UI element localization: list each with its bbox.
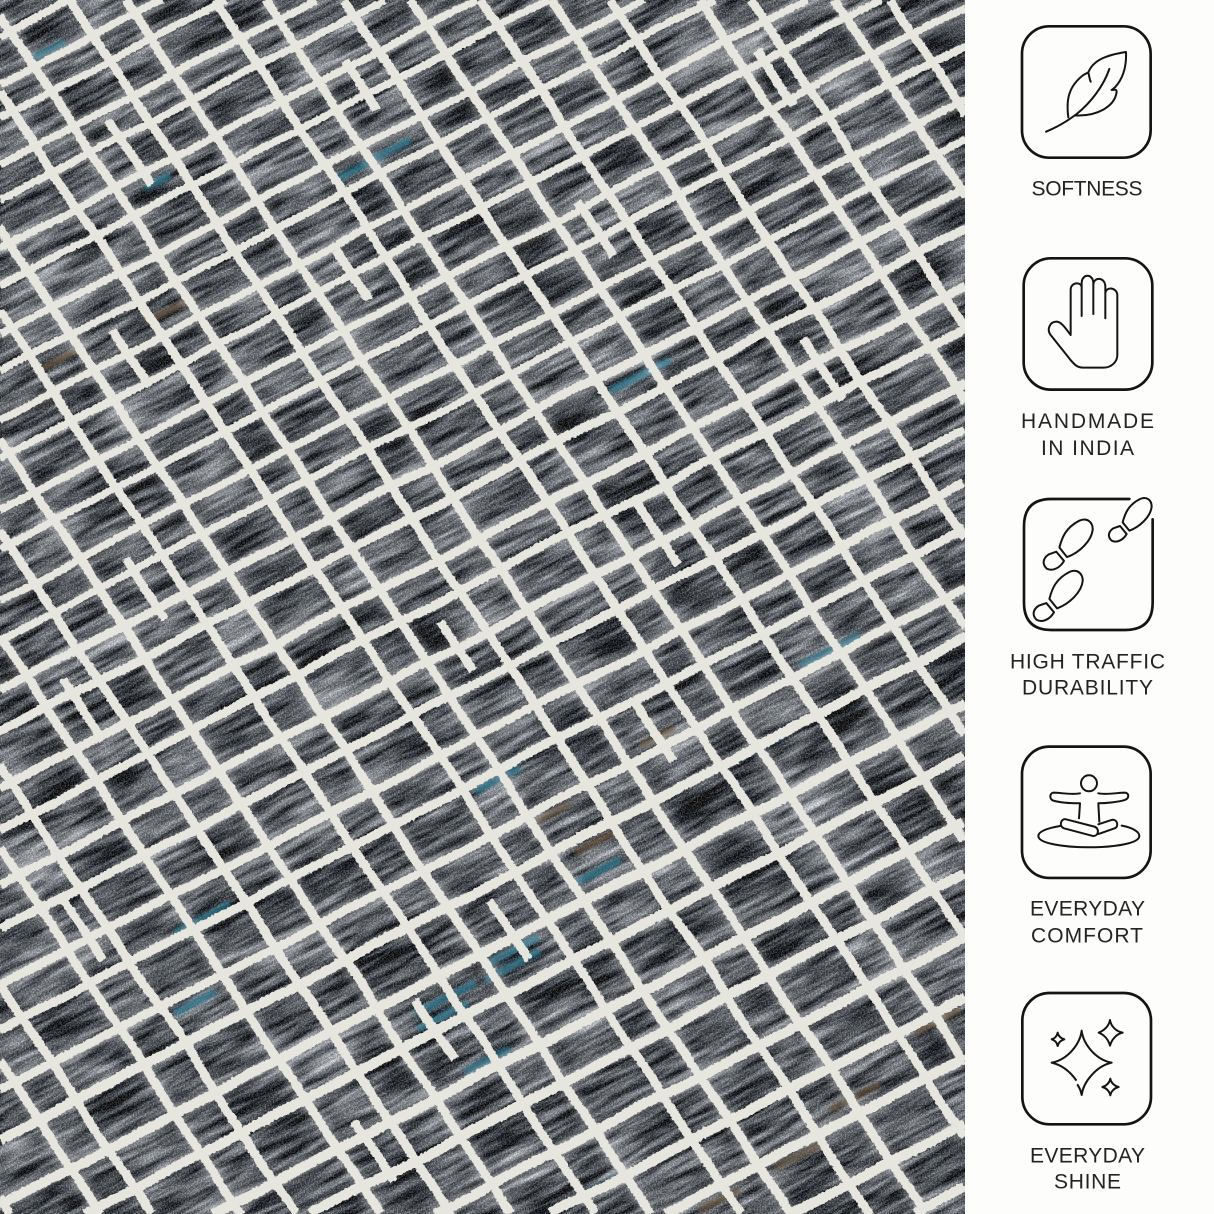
pale halo around grid lines	[0, 0, 965, 1214]
icon: feather	[1022, 26, 1151, 158]
feature: everyday shine: SHINE	[1054, 1170, 1121, 1194]
feature: everyday comfort	[1022, 747, 1151, 948]
rug photo	[0, 0, 965, 1214]
feature: high traffic durability	[1010, 498, 1165, 700]
feature: everyday comfort: COMFORT	[1031, 924, 1143, 948]
feature: handmade in india	[1021, 258, 1154, 460]
label: high traffic durability: HIGH TRAFFIC	[1010, 650, 1165, 674]
label: handmade in india: HANDMADE	[1021, 410, 1154, 433]
icon: meditating person	[1022, 747, 1151, 878]
icon: hand	[1024, 258, 1152, 390]
feature: softness	[1022, 26, 1151, 201]
icon column	[1010, 26, 1165, 1194]
icon: sparkles	[1022, 993, 1151, 1124]
feature: everyday shine	[1022, 993, 1151, 1194]
label: everyday comfort: EVERYDAY	[1030, 898, 1145, 920]
icon: footprints	[1024, 498, 1153, 630]
label: everyday shine: EVERYDAY	[1030, 1144, 1145, 1168]
label: softness: SOFTNESS	[1032, 178, 1142, 200]
grid lines woven in ivory	[0, 0, 965, 1214]
feature: handmade in india: IN INDIA	[1041, 437, 1134, 460]
feature: high traffic durability: DURABILITY	[1022, 676, 1153, 700]
